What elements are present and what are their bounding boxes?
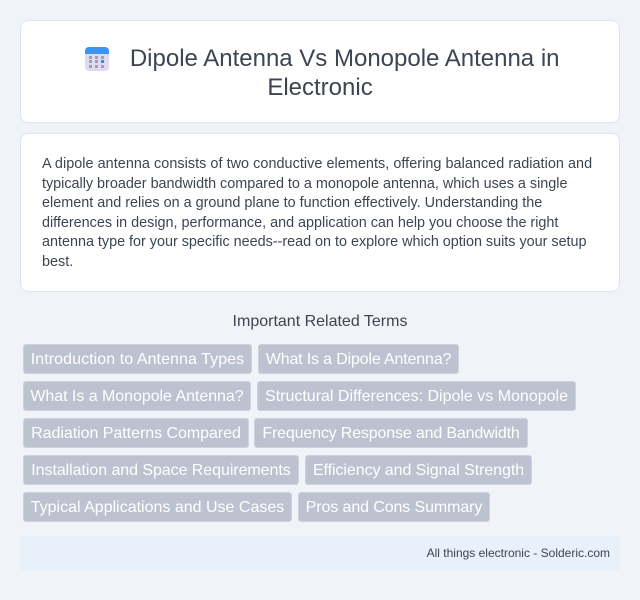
text block: description: typically broader bandwidth compared to a monopole antenna, which uses a single (42, 176, 567, 192)
title: Electronic (267, 74, 373, 101)
footer bar (20, 536, 620, 570)
title (130, 45, 560, 101)
tag: Radiation Patterns Compared (31, 425, 241, 442)
panel: title card (20, 20, 620, 123)
tag: Structural Differences: Dipole vs Monopole (265, 388, 568, 405)
text block: description: best. (42, 254, 73, 270)
tag (257, 381, 576, 411)
tag: Efficiency and Signal Strength (313, 462, 524, 479)
text block: description: element and relies on a ground plane to function effectively. Understanding the (42, 195, 542, 211)
tag (254, 418, 528, 448)
text block: description (42, 156, 592, 270)
tag list (23, 344, 576, 522)
tag (305, 455, 532, 485)
text block: description: antenna type for your specific needs--read on to explore which option suits your setup (42, 234, 587, 250)
tag (23, 492, 292, 522)
footer text: All things electronic - Solderic.com (427, 546, 610, 560)
tag (298, 492, 490, 522)
icon: calendar app (85, 47, 109, 71)
tag: Introduction to Antenna Types (31, 351, 244, 368)
tag: Typical Applications and Use Cases (31, 499, 284, 516)
tag (23, 455, 299, 485)
tag (23, 381, 251, 411)
tag: Pros and Cons Summary (306, 499, 482, 516)
title: Dipole Antenna Vs Monopole Antenna in (130, 45, 560, 72)
tag (23, 344, 252, 374)
tag (23, 418, 249, 448)
tag: Frequency Response and Bandwidth (262, 425, 520, 442)
tag: What Is a Monopole Antenna? (30, 388, 244, 405)
heading: related terms: Important Related Terms (233, 313, 407, 330)
tag (258, 344, 459, 374)
tag: What Is a Dipole Antenna? (266, 351, 451, 368)
text block: description: differences in design, performance, and application can help you choose the right (42, 214, 558, 230)
tag: Installation and Space Requirements (31, 462, 291, 479)
panel: description (20, 133, 620, 292)
text block: description: A dipole antenna consists of two conductive elements, offering balanced radiation and (42, 156, 592, 172)
